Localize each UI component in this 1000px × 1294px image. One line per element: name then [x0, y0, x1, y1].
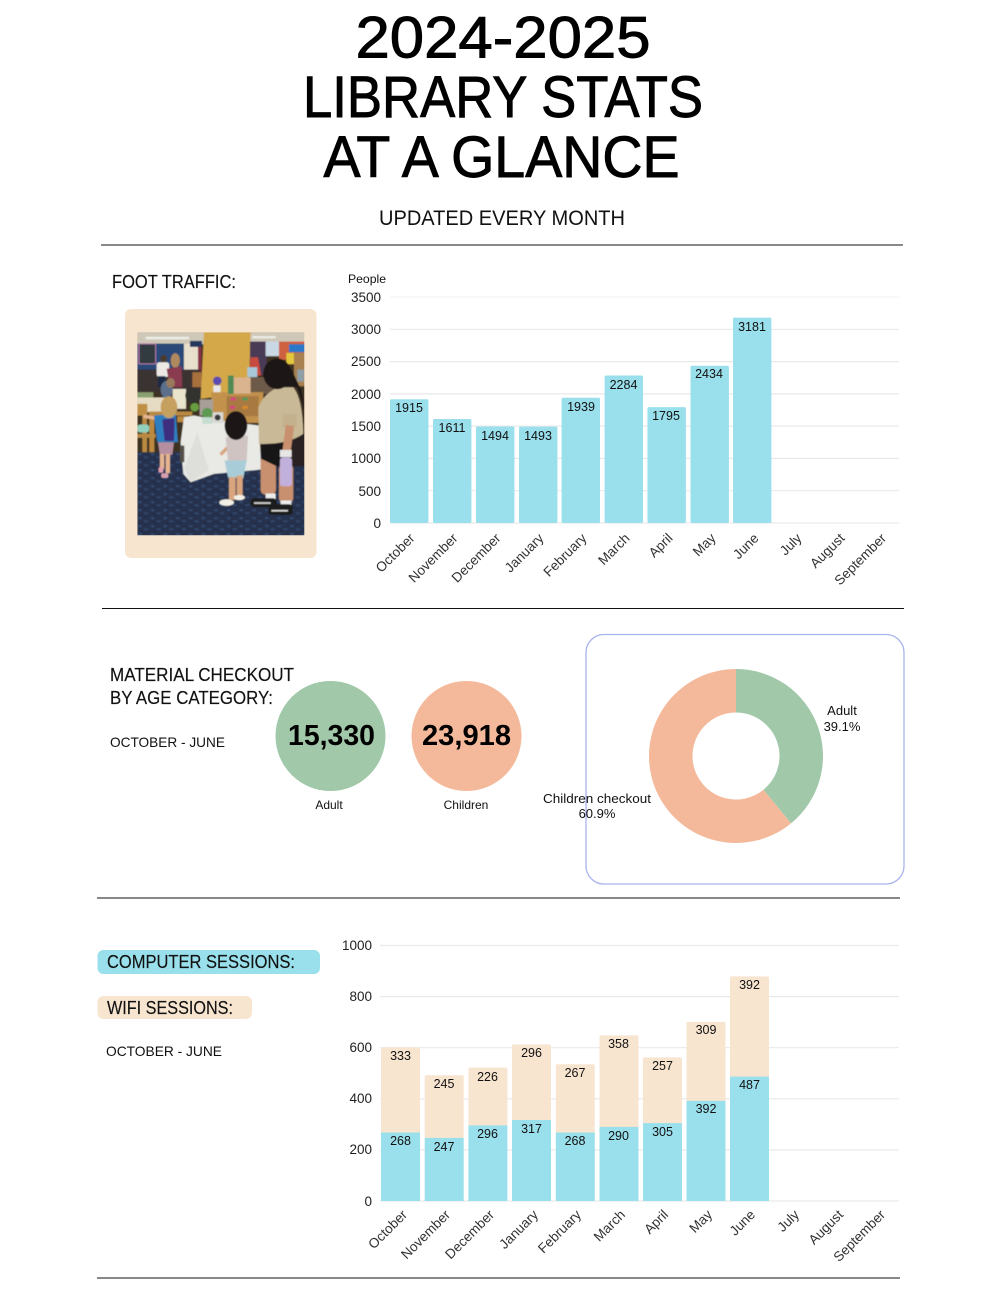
data labels: 1795 — [652, 409, 680, 423]
data labels: 1611 — [439, 421, 465, 435]
stat: adult checkouts — [276, 681, 386, 812]
month labels: October — [365, 1207, 410, 1252]
stat: adult checkouts: 15,330 — [288, 720, 375, 752]
computer data labels: 296 — [477, 1127, 498, 1141]
photo panel: library visitors — [125, 309, 316, 558]
data labels: 2284 — [610, 378, 637, 392]
y axis labels: 0 — [364, 1194, 372, 1209]
month labels: January — [496, 1207, 541, 1252]
month labels: April — [641, 1207, 671, 1237]
wifi data labels — [390, 978, 760, 1091]
month labels — [373, 530, 889, 588]
month labels: September — [830, 1207, 888, 1265]
y axis labels: 2500 — [351, 354, 381, 369]
donut slice: adult — [736, 669, 823, 823]
data labels: 3181 — [738, 320, 766, 334]
wifi data labels: 245 — [434, 1077, 454, 1091]
computer data labels: 268 — [390, 1134, 411, 1148]
month labels: July — [777, 530, 805, 558]
panel: donut chart — [543, 634, 904, 884]
computer data labels: 305 — [652, 1125, 673, 1139]
title: AT A GLANCE — [324, 125, 680, 190]
heading: material checkout: MATERIAL CHECKOUT — [110, 665, 294, 685]
computer data labels: 487 — [739, 1078, 760, 1092]
pillar — [201, 332, 251, 399]
computer data labels: 290 — [608, 1129, 629, 1143]
y axis labels: 400 — [349, 1091, 372, 1106]
y axis labels: 3500 — [351, 290, 381, 305]
month labels: March — [591, 1207, 628, 1244]
date range: checkout: OCTOBER - JUNE — [110, 734, 225, 750]
heading: material checkout — [110, 665, 294, 708]
stat: children checkouts: Children — [444, 798, 488, 812]
subtitle: UPDATED EVERY MONTH — [379, 207, 625, 230]
label: adult share: Adult — [827, 703, 857, 718]
month labels: March — [595, 531, 633, 568]
label: children share — [543, 791, 651, 821]
month labels: December — [442, 1207, 497, 1262]
right wall — [250, 342, 267, 375]
toddler — [221, 447, 228, 455]
computer data labels: 317 — [521, 1122, 542, 1136]
stat: adult checkouts: Adult — [315, 798, 343, 812]
wifi data labels: 309 — [696, 1023, 716, 1037]
woman — [261, 456, 276, 495]
month labels: February — [535, 1207, 584, 1256]
month labels: November — [398, 1207, 453, 1262]
month labels: December — [449, 530, 504, 585]
y axis labels: 500 — [358, 484, 381, 499]
wifi bars — [381, 976, 769, 1138]
month labels: August — [807, 530, 848, 571]
month labels: January — [502, 530, 547, 575]
wifi data labels: 296 — [521, 1046, 542, 1060]
title: 2024-2025 — [356, 6, 650, 70]
y axis labels: 1000 — [351, 451, 381, 466]
month labels: October — [373, 530, 418, 575]
bar chart: foot traffic — [348, 272, 899, 588]
data labels: 1493 — [524, 429, 552, 443]
wifi data labels: 333 — [390, 1049, 411, 1063]
month labels: June — [727, 1207, 758, 1238]
computer data labels — [390, 1078, 760, 1154]
label: children share: 60.9% — [579, 806, 616, 821]
month labels — [365, 1207, 888, 1265]
y axis labels: 200 — [349, 1142, 372, 1157]
stacked bar chart: sessions — [342, 938, 899, 1265]
stat: children checkouts — [412, 681, 522, 812]
legend: computer sessions: COMPUTER SESSIONS: — [107, 952, 295, 972]
month labels: May — [686, 1207, 715, 1236]
legend: wifi sessions: WIFI SESSIONS: — [107, 998, 233, 1018]
month labels: February — [541, 530, 590, 580]
month labels: July — [774, 1207, 802, 1235]
month labels: September — [831, 530, 889, 588]
date range: sessions: OCTOBER - JUNE — [106, 1043, 222, 1059]
background adults — [160, 355, 167, 363]
bars — [390, 318, 771, 523]
wifi data labels: 257 — [652, 1059, 673, 1073]
heading: foot traffic: FOOT TRAFFIC: — [112, 272, 236, 292]
wifi data labels: 358 — [608, 1037, 629, 1051]
wifi data labels: 267 — [565, 1066, 585, 1080]
data labels: 1939 — [567, 400, 595, 414]
y axis labels: 1500 — [351, 419, 381, 434]
heading: material checkout: BY AGE CATEGORY: — [110, 688, 273, 708]
data labels: 2434 — [695, 367, 723, 381]
data labels: 1915 — [395, 401, 423, 415]
axis title: people: People — [348, 272, 386, 286]
computer data labels: 392 — [696, 1102, 716, 1116]
y axis labels: 3000 — [351, 322, 381, 337]
wifi data labels: 226 — [477, 1070, 498, 1084]
title — [303, 6, 703, 190]
title: LIBRARY STATS — [303, 65, 703, 130]
donut slice: children — [649, 669, 791, 843]
y axis labels: 0 — [373, 516, 381, 531]
label: children share: Children checkout — [543, 791, 651, 806]
label: adult share: 39.1% — [824, 719, 861, 734]
y axis labels: 800 — [349, 989, 372, 1004]
computer data labels: 247 — [434, 1140, 454, 1154]
y axis labels: 600 — [349, 1040, 372, 1055]
photo: families at library table — [137, 332, 305, 536]
cabinet — [211, 392, 263, 423]
y axis labels: 2000 — [351, 387, 381, 402]
stat: children checkouts: 23,918 — [422, 720, 511, 752]
month labels: August — [806, 1207, 846, 1248]
data labels — [395, 320, 766, 443]
y axis labels: 1000 — [342, 938, 372, 953]
table — [181, 416, 261, 482]
wifi data labels: 392 — [739, 978, 760, 992]
month labels: April — [646, 531, 676, 560]
month labels: June — [730, 531, 762, 562]
data labels: 1494 — [481, 429, 509, 443]
month labels: November — [406, 530, 461, 585]
computer bars — [381, 1077, 769, 1201]
computer data labels: 268 — [565, 1134, 585, 1148]
girl in blue — [143, 416, 156, 418]
month labels: May — [690, 530, 719, 559]
y axis labels — [342, 938, 372, 1209]
y axis labels — [351, 290, 381, 531]
label: adult share — [824, 703, 861, 734]
